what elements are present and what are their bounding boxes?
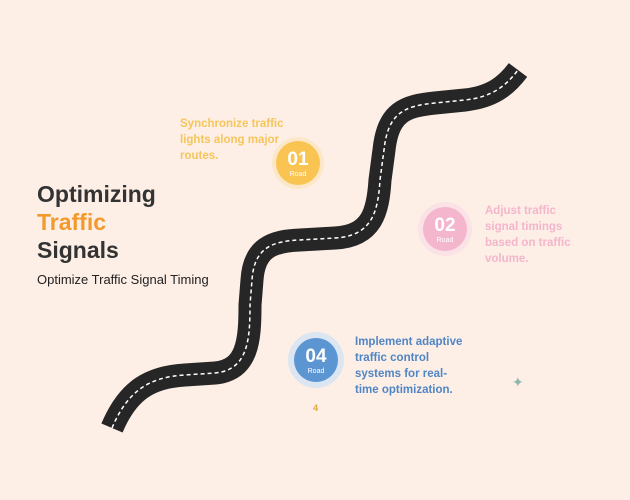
- title: Optimizing: [37, 181, 156, 207]
- title: Traffic: [37, 209, 106, 235]
- step 04 circle: Road: [308, 368, 324, 375]
- step 04 text: Implement adaptive: [355, 336, 462, 348]
- step 01 text: lights along major: [180, 134, 279, 146]
- page number: 4: [313, 403, 318, 413]
- step 04 text: [355, 336, 462, 396]
- step 02 text: volume.: [485, 253, 528, 265]
- step 04 text: time optimization.: [355, 384, 453, 396]
- title: [37, 181, 156, 263]
- step 02 text: signal timings: [485, 221, 562, 233]
- subtitle: Optimize Traffic Signal Timing: [37, 272, 209, 287]
- step 04 circle: 04: [305, 346, 327, 367]
- title: Signals: [37, 237, 119, 263]
- step 01 text: routes.: [180, 150, 218, 162]
- step 02 circle: [423, 207, 467, 251]
- step 04 circle: [294, 338, 338, 382]
- step 02 circle: 02: [434, 215, 456, 236]
- step 01 circle: Road: [290, 171, 306, 178]
- step 02 text: Adjust traffic: [485, 205, 556, 217]
- step 02 text: based on traffic: [485, 237, 571, 249]
- step 04 text: traffic control: [355, 352, 429, 364]
- step 01 circle: 01: [287, 149, 309, 170]
- step 04 text: systems for real-: [355, 368, 447, 380]
- step 02 text: [485, 205, 571, 265]
- step 01 circle: [276, 141, 320, 185]
- icon: sparkle: ✦: [512, 374, 524, 390]
- step 01 text: Synchronize traffic: [180, 118, 284, 130]
- step 01 text: [180, 118, 284, 162]
- step 02 circle: Road: [437, 237, 453, 244]
